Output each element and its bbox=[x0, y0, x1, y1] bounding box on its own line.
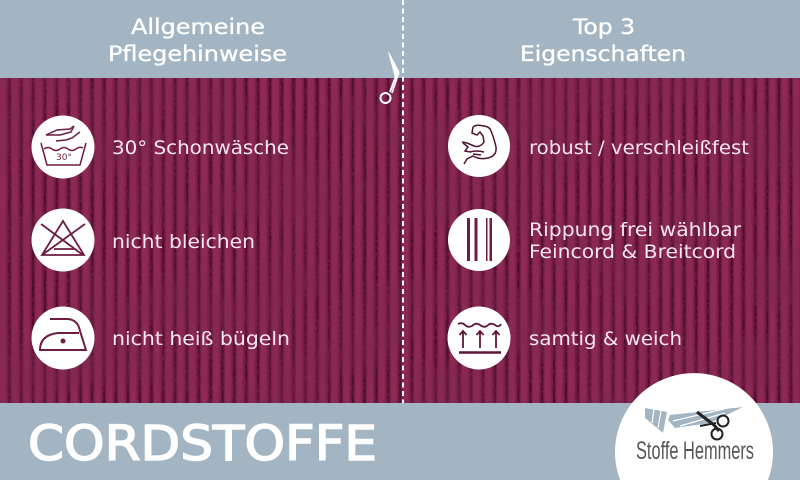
label: rib choice: Rippung frei wählbar bbox=[529, 219, 741, 241]
icon: fabric and scissors bbox=[645, 407, 743, 440]
icon: ribs bbox=[448, 209, 510, 271]
label: no hot ironing: nicht heiß bügeln bbox=[112, 328, 290, 350]
icon: soft surface with arrows bbox=[448, 306, 510, 370]
heading: Top 3 Eigenschaften bbox=[520, 15, 686, 67]
title: CORDSTOFFE: CORDSTOFFE bbox=[28, 416, 377, 472]
label: 30 degree wash: 30° Schonwäsche bbox=[112, 137, 289, 159]
heading: Allgemeine Pflegehinweise: Allgemeine bbox=[131, 15, 265, 40]
dashed cut line bbox=[402, 0, 404, 403]
heading: Allgemeine Pflegehinweise: Pflegehinweise bbox=[108, 42, 287, 67]
panel: bottom band bbox=[0, 403, 800, 480]
heading: Top 3 Eigenschaften: Eigenschaften bbox=[520, 42, 686, 67]
label: rib choice: Feincord & Breitcord bbox=[529, 241, 736, 263]
panel: top band bbox=[0, 0, 800, 78]
logo: Stoffe Hemmers bbox=[615, 373, 773, 480]
heading: Top 3 Eigenschaften: Top 3 bbox=[572, 15, 635, 40]
panel: corduroy fabric background bbox=[0, 76, 800, 404]
icon: no hot ironing bbox=[32, 306, 94, 370]
label: robust: robust / verschleißfest bbox=[529, 137, 749, 159]
icon: small scissors on cut line bbox=[380, 52, 399, 103]
icon: flexed arm bbox=[448, 115, 510, 177]
heading: Allgemeine Pflegehinweise bbox=[108, 15, 287, 67]
icon: 30 degree wash bbox=[32, 116, 94, 178]
label: do not bleach: nicht bleichen bbox=[112, 231, 255, 253]
icon: do not bleach bbox=[32, 208, 94, 272]
label: soft: samtig & weich bbox=[529, 328, 682, 350]
icon: 30 degree wash: 30° bbox=[56, 153, 72, 163]
label: rib choice bbox=[529, 219, 741, 263]
